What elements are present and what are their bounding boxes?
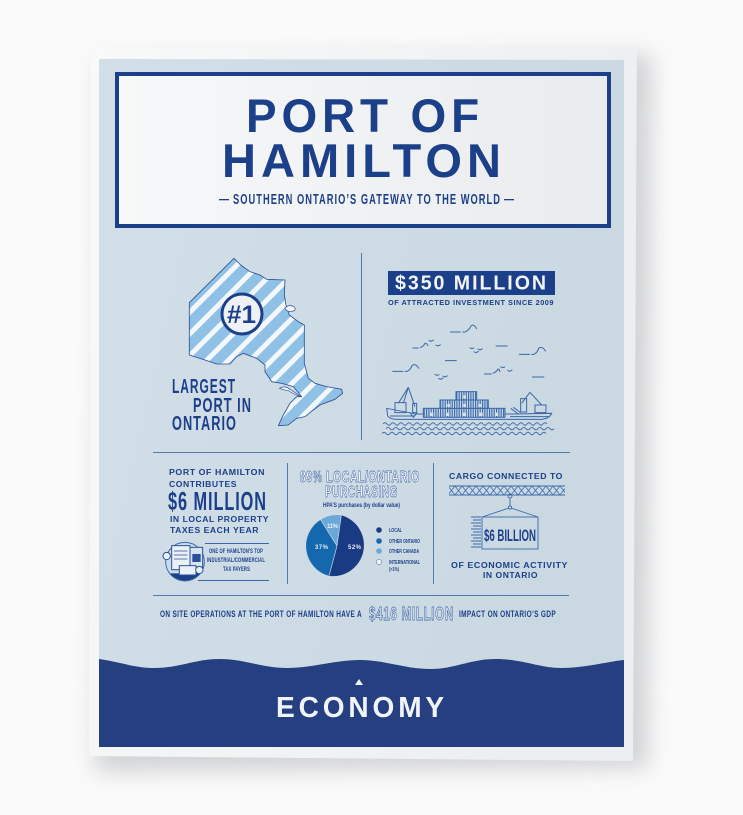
investment amount: $350 MILLION <box>395 272 548 294</box>
birds and clouds <box>392 325 546 379</box>
cargo caption <box>451 561 568 580</box>
title <box>222 89 506 187</box>
subtitle: SOUTHERN ONTARIO’S GATEWAY TO THE WORLD <box>233 192 501 208</box>
poster panel <box>99 59 624 747</box>
panel: purchasing <box>300 469 420 576</box>
pie chart <box>306 515 364 576</box>
containers <box>423 392 505 417</box>
title: HAMILTON <box>222 134 506 187</box>
tax heading: PORT OF HAMILTON <box>169 468 265 477</box>
tax payer note: ONE OF HAMILTON’S TOP <box>209 549 263 555</box>
right crane <box>511 392 546 414</box>
paper sheet <box>89 46 637 761</box>
largest port label: ONTARIO <box>172 413 237 435</box>
vertical divider <box>361 253 362 440</box>
tax payer note: INDUSTRIAL/COMMERCIAL <box>207 558 265 564</box>
number one badge <box>222 294 262 334</box>
cargo caption: IN ONTARIO <box>483 571 538 580</box>
tax payer note <box>198 543 269 581</box>
tax heading <box>169 468 265 489</box>
tax caption: IN LOCAL PROPERTY <box>170 515 269 524</box>
panel: cargo <box>449 472 568 580</box>
largest port label: PORT IN <box>193 395 252 417</box>
pie chart: 37% <box>315 545 329 551</box>
purchasing heading: PURCHASING <box>325 484 398 501</box>
panel: investment <box>382 271 555 435</box>
GDP statement: IMPACT ON ONTARIO’S GDP <box>459 609 556 620</box>
GDP statement <box>160 604 556 624</box>
economy label: ECONOMY <box>276 692 448 724</box>
GDP statement: $416 MILLION <box>369 604 454 624</box>
icon: triangle <box>355 679 363 685</box>
container illustration <box>471 494 538 549</box>
tax caption <box>170 515 269 535</box>
crane truss <box>449 486 565 495</box>
investment caption: OF ATTRACTED INVESTMENT SINCE 2009 <box>388 298 554 307</box>
chart subtitle: HPA’S purchases (by dollar value) <box>323 502 400 509</box>
pie legend: LOCAL <box>389 528 402 534</box>
GDP statement: ON SITE OPERATIONS AT THE PORT OF HAMILTON HAVE A <box>160 609 362 620</box>
paper shadow <box>95 54 652 772</box>
water waves <box>382 423 554 435</box>
map of Ontario <box>189 258 343 426</box>
pie legend <box>376 527 420 573</box>
horizontal divider <box>153 452 570 453</box>
title box <box>117 74 609 226</box>
six billion figure: $6 BILLION <box>484 526 536 545</box>
number one badge: #1 <box>227 301 256 329</box>
pie chart: 52% <box>348 545 362 551</box>
column divider <box>433 463 434 584</box>
horizontal divider <box>153 595 569 596</box>
cargo caption: OF ECONOMIC ACTIVITY <box>451 561 568 570</box>
pie legend: INTERNATIONAL <box>389 560 420 566</box>
purchasing heading <box>300 469 420 501</box>
column divider <box>287 463 288 584</box>
icon: tax documents <box>163 542 204 581</box>
left crane <box>395 387 417 417</box>
six million figure: $6 MILLION <box>168 486 267 516</box>
tax caption: TAXES EACH YEAR <box>170 526 259 535</box>
pie legend: OTHER ONTARIO <box>389 539 420 545</box>
tax heading: CONTRIBUTES <box>169 480 237 489</box>
cargo heading: CARGO CONNECTED TO <box>449 472 563 481</box>
pie legend: OTHER CANADA <box>389 549 419 555</box>
panel: property taxes <box>163 468 269 581</box>
ship illustration <box>387 325 552 419</box>
largest port label <box>172 376 252 435</box>
panel: largest port <box>172 258 343 435</box>
pie chart: 11% <box>327 524 339 530</box>
title: PORT OF <box>246 89 484 142</box>
pie legend: (>1%) <box>389 567 399 573</box>
hull <box>387 408 552 419</box>
tax payer note: TAX PAYERS <box>223 567 250 573</box>
purchasing heading: 89% LOCAL/ONTARIO <box>300 469 420 486</box>
largest port label: LARGEST <box>172 376 236 398</box>
economy wave band <box>99 659 624 747</box>
